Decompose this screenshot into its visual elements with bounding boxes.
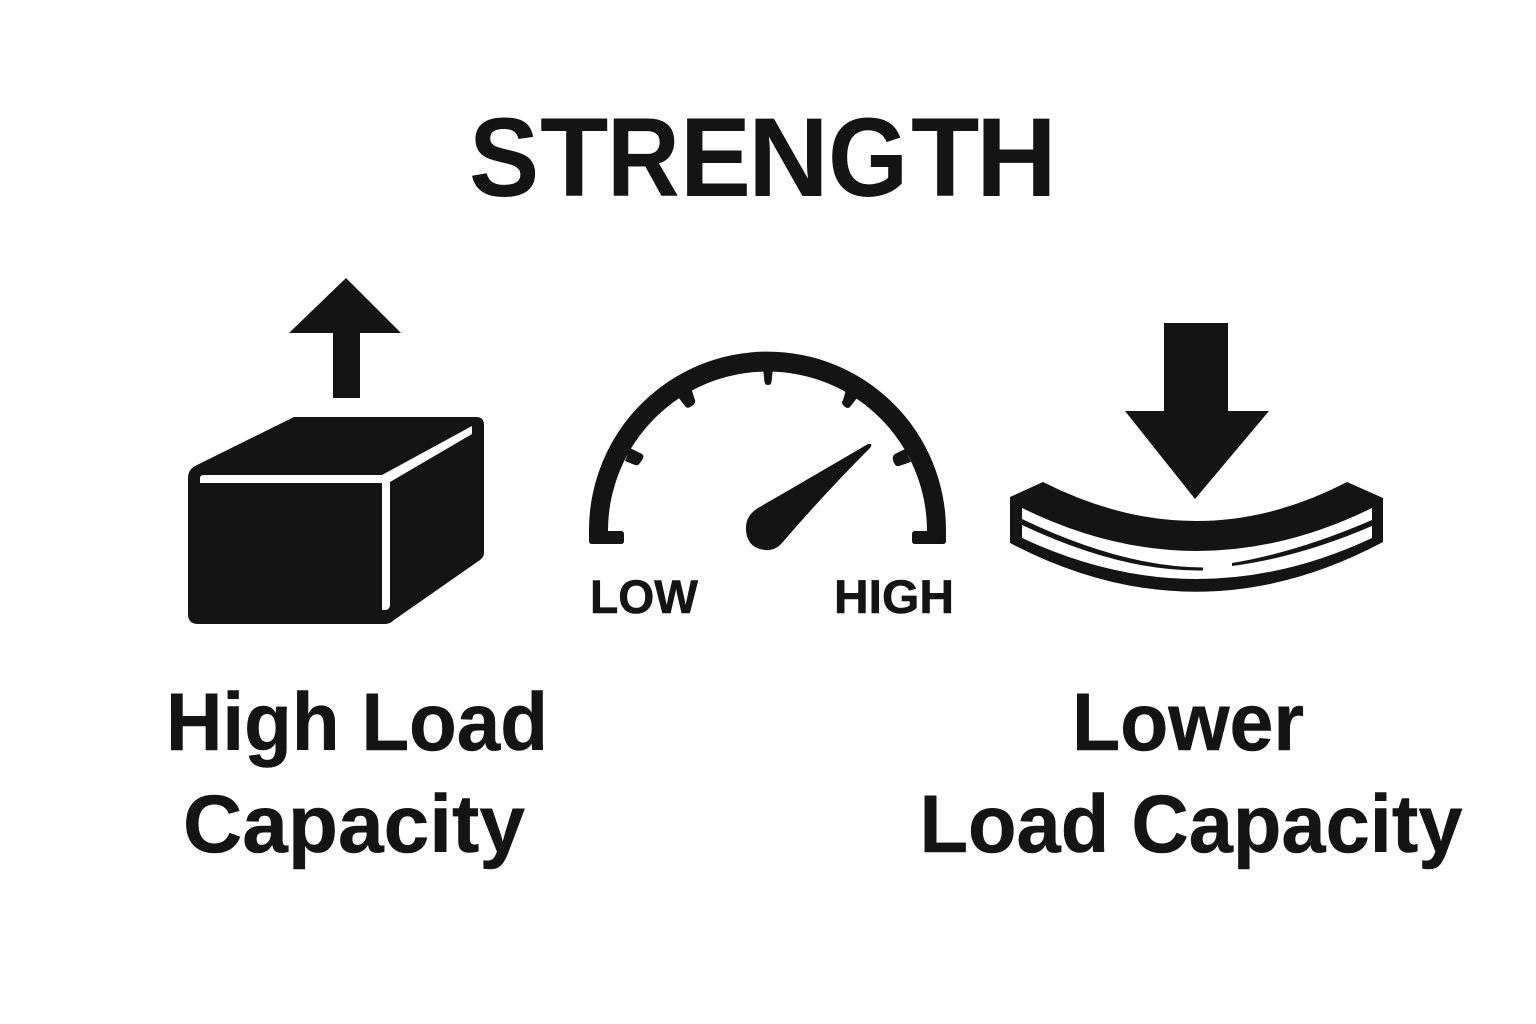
label: lower load capacity: Load Capacity [920, 779, 1463, 870]
label: high load capacity: Capacity [183, 779, 525, 870]
box [188, 417, 484, 624]
label: high: HIGH [834, 570, 954, 623]
label: low: LOW [590, 570, 699, 623]
title: R [607, 95, 680, 220]
icon: gauge [589, 352, 954, 623]
title: S [469, 96, 539, 221]
title [469, 95, 1057, 221]
title: T [911, 95, 979, 220]
gauge ticks [625, 368, 911, 466]
beam inner lines [1022, 519, 1372, 571]
label: lower load capacity: Lower [1072, 677, 1304, 768]
label: lower load capacity [920, 677, 1463, 870]
gauge arc [589, 352, 946, 544]
arrow: down [1125, 323, 1269, 499]
icon: bending beam with down arrow [1010, 323, 1383, 592]
title: H [976, 95, 1057, 220]
title: T [540, 95, 608, 220]
title: N [748, 95, 829, 220]
label: high load capacity: High Load [166, 677, 548, 768]
beam [1010, 482, 1383, 592]
icon: box with up arrow [188, 278, 484, 624]
label: high load capacity [166, 677, 548, 870]
title: E [680, 96, 751, 221]
beam highlight [1022, 508, 1372, 579]
arrow: up [289, 278, 401, 398]
needle [746, 444, 871, 550]
title: G [828, 95, 908, 220]
